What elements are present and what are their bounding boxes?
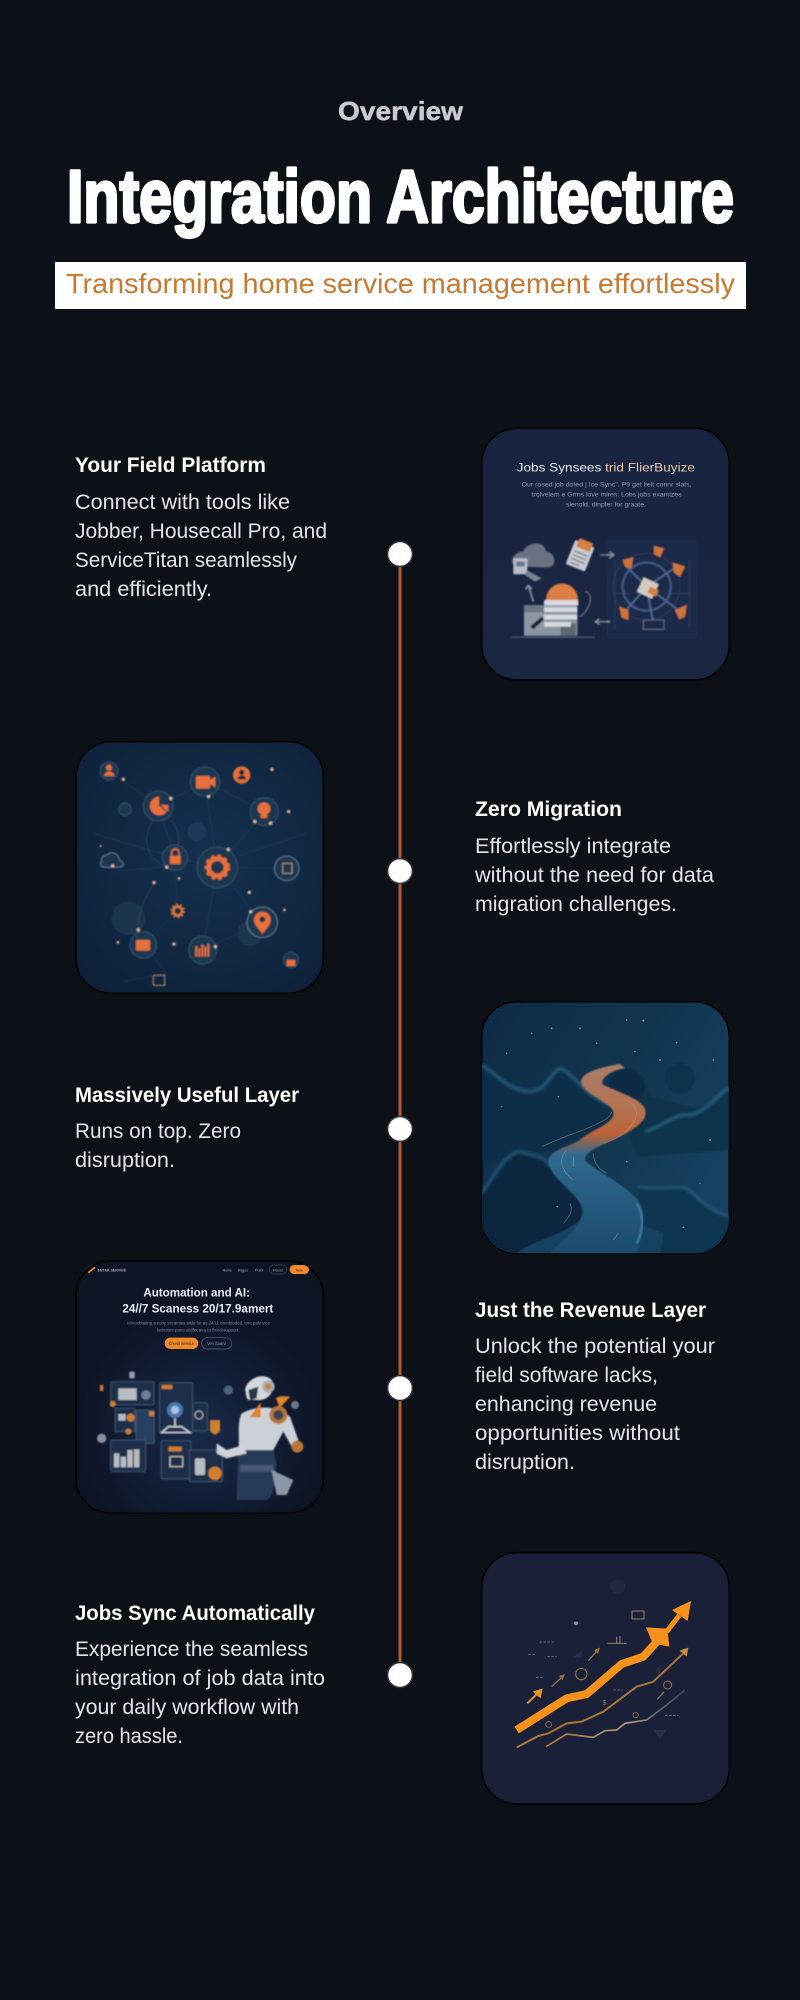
image card: connected tools network [76,742,323,993]
image card: automation and AI web page: Annoubtating a cony sscamies wide for as 24/11 orenbtoded, une pale vice [127,1321,270,1326]
image card: revenue growth arrows: $ [602,1698,606,1707]
small arrows and icons [526,1694,537,1704]
image card: job sync diagram: trolvelem e Grms love mires. Lobs jobs examizes [532,492,682,499]
text block: Just the Revenue Layer [475,1299,715,1474]
text block: Massively Useful Layer: disruption. [75,1149,175,1172]
growth lines [546,1690,685,1747]
image card: automation and AI web page: bainstes pave ardfecava to fixed support [157,1327,239,1332]
subtitle banner: Transforming home service management effortlessly [66,268,735,299]
text block: Your Field Platform: Connect with tools like [75,491,290,514]
text block: Your Field Platform: Jobber, Housecall Pro, and [75,520,327,543]
image card: automation and AI web page: Home [223,1267,233,1272]
road [548,1064,646,1253]
nodes [100,762,299,968]
small dots [100,768,290,948]
text block: Just the Revenue Layer: field software lacks, [475,1364,658,1387]
text block: Zero Migration [474,798,714,916]
text block: Just the Revenue Layer: disruption. [475,1451,575,1474]
clipboard [566,537,596,572]
image card: winding road landscape [482,1002,729,1253]
text block: Zero Migration: without the need for data [474,864,714,887]
text block: Zero Migration: Zero Migration [475,798,622,821]
text block: Massively Useful Layer [75,1084,299,1172]
text block: Jobs Sync Automatically [75,1602,325,1748]
text block: Your Field Platform: Your Field Platform [75,454,266,477]
timeline line [398,553,402,1675]
text block: Massively Useful Layer: Massively Useful Layer [75,1084,299,1107]
text block: Jobs Sync Automatically: your daily workflow with [75,1696,299,1719]
text block: Jobs Sync Automatically: Experience the seamless [75,1638,308,1661]
image card: job sync diagram: Jobs Synsees trid FlierBuyize [517,461,695,475]
image card: automation and AI web page: Pages [238,1267,248,1272]
image card: job sync diagram [482,428,729,680]
hub panel [607,540,697,639]
text block: Zero Migration: migration challenges. [475,893,677,916]
text block: Jobs Sync Automatically: Jobs Sync Automatically [75,1602,315,1625]
timeline dots [388,542,412,1688]
text block: Jobs Sync Automatically: zero hassle. [75,1725,183,1748]
image card: job sync diagram: slenold, dinpler for graate. [566,501,646,508]
text block: Massively Useful Layer: Runs on top. Zero [75,1120,241,1143]
cloud [512,544,554,567]
image card: job sync diagram: Our rosed job doted | Ice Sync". P9 get lielt connr slats, [522,482,692,489]
image card: automation and AI web page: Chosit Service [169,1341,195,1346]
image card: automation and AI web page [76,1261,323,1513]
image card: automation and AI web page: 24//7 Scaness 20/17.9amert [122,1301,273,1315]
eyebrow: Overview: Overview [338,96,464,126]
image card: automation and AI web page: ENTER SERVICE [98,1268,126,1273]
image card: automation and AI web page: Point [255,1267,264,1272]
text block: Just the Revenue Layer: Unlock the potential your [475,1335,715,1358]
text block: Just the Revenue Layer: Just the Revenue Layer [475,1299,706,1322]
text block: Zero Migration: Effortlessly integrate [475,835,671,858]
text block: Just the Revenue Layer: enhancing revenue [475,1393,657,1416]
text block: Just the Revenue Layer: opportunities without [475,1422,680,1445]
dashboard panels [111,1382,223,1482]
image card: automation and AI web page: Pound [273,1267,283,1272]
orange glyphs [104,765,295,966]
building [524,605,577,636]
image card: automation and AI web page: Ven Saarvi [207,1341,226,1346]
hills [482,1063,729,1253]
image card: automation and AI web page: Automation and AI: [143,1286,250,1300]
text block: Your Field Platform: ServiceTitan seamlessly [75,549,297,572]
image card: automation and AI web page: Now [296,1267,303,1272]
text block: Your Field Platform [75,454,327,601]
text block: Jobs Sync Automatically: integration of job data into [75,1667,325,1690]
image card: revenue growth arrows [482,1553,729,1804]
subtitle banner [55,262,746,309]
robot [238,1407,298,1450]
text block: Your Field Platform: and efficiently. [75,578,212,601]
stars [501,1019,714,1228]
